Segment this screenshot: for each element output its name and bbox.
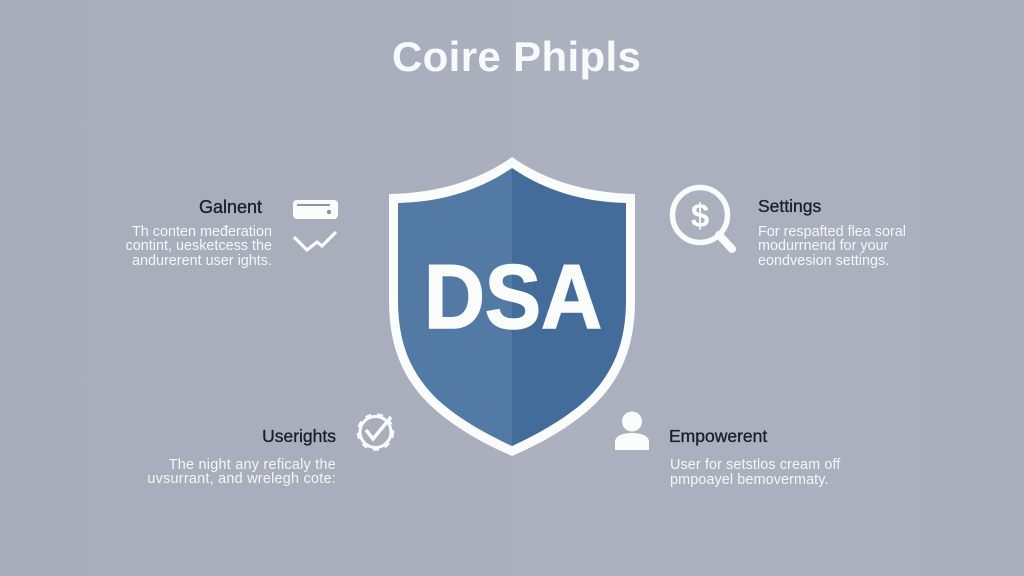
icon: person — [615, 412, 649, 450]
text: Empowerent description — [670, 457, 840, 488]
text: Empowerent description: pmpoayel bemovermaty. — [670, 472, 829, 488]
text: Galnent description: andurerent user ights. — [132, 253, 272, 269]
text: Empowerent description: User for setstlos cream off — [670, 457, 840, 473]
text: Galnent description — [126, 224, 272, 269]
text: Userights description — [147, 457, 336, 487]
text: Settings description: modurrnend for your — [758, 238, 888, 254]
text: Galnent description: Th conten međeration — [132, 224, 272, 240]
heading: Galnent: Galnent — [199, 197, 262, 217]
heading: Empowerent: Empowerent — [669, 426, 767, 446]
shield with DSA — [389, 157, 635, 456]
icon: card and trend — [293, 200, 338, 252]
text: Galnent description: contint, uesketcess the — [126, 238, 272, 254]
text: Settings description: eondvesion settings. — [758, 253, 889, 269]
icon: dollar magnifier: $ — [691, 197, 709, 234]
text: Userights description: The night any reficaly the — [169, 457, 336, 473]
text: Settings description — [758, 224, 906, 269]
heading: Userights: Userights — [262, 426, 336, 446]
text: Settings description: For respafted flea soral — [758, 224, 906, 240]
icon: dollar magnifier — [670, 184, 736, 253]
icon: badge check — [356, 413, 394, 451]
text: Userights description: uvsurrant, and wrelegh cote: — [147, 471, 336, 487]
shield with DSA: DSA — [424, 247, 602, 348]
title: Coire Phipls — [392, 33, 641, 80]
heading: Settings: Settings — [758, 196, 821, 216]
